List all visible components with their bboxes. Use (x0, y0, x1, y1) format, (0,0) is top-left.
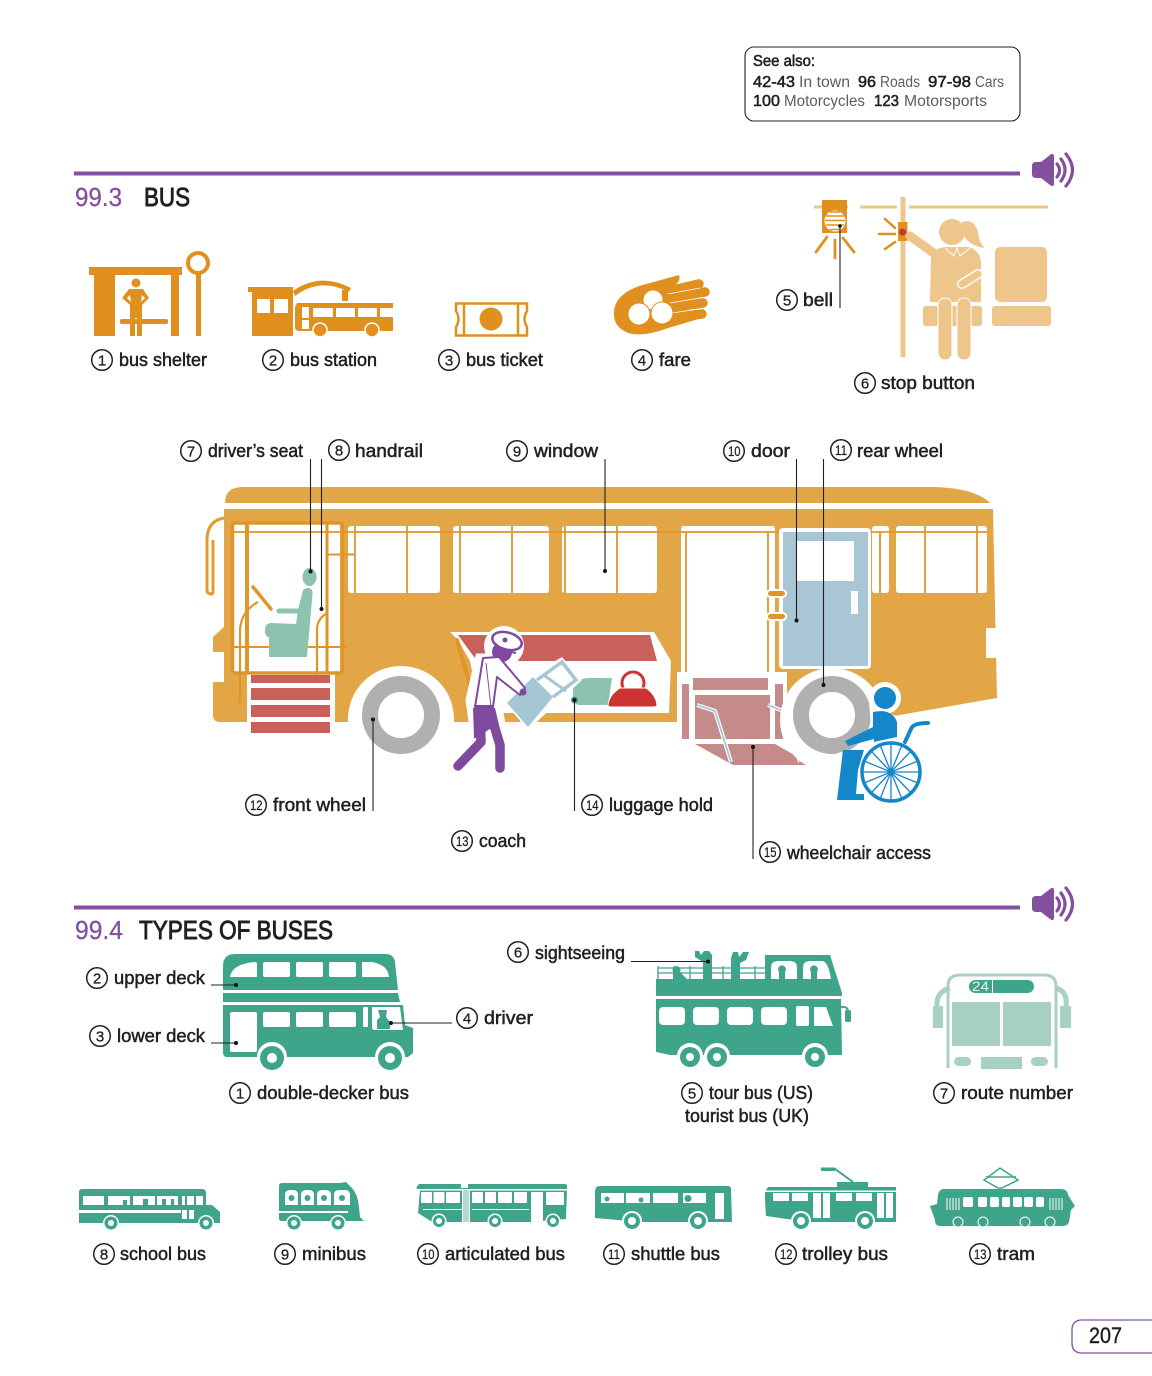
label: school bus: school bus (120, 1244, 206, 1264)
leader: window (603, 459, 607, 573)
label: tour bus: tour bus (US) (709, 1083, 813, 1103)
label: stop button: stop button (881, 373, 975, 393)
label: fare: fare (659, 350, 691, 370)
label: bell (777, 290, 833, 310)
label: driver (457, 1008, 533, 1028)
label: rear wheel: 11 (835, 442, 847, 458)
icon: route number bus front: 24 (972, 978, 989, 994)
label: window: window (533, 441, 599, 461)
heading 99.3 (75, 182, 190, 212)
icon: tram (930, 1168, 1075, 1227)
label: route number: 7 (940, 1086, 948, 1102)
label: wheelchair access: 15 (764, 844, 777, 860)
label: lower deck: 3 (96, 1028, 104, 1046)
heading 99.3: 99.3 (75, 182, 122, 212)
label: window (507, 441, 599, 461)
label: luggage hold: 14 (586, 797, 599, 813)
label: fare: 4 (638, 352, 646, 370)
label: coach (452, 831, 526, 851)
label: trolley bus: 12 (780, 1246, 793, 1262)
driver's seat (265, 568, 316, 657)
icon: tour bus (656, 951, 851, 1069)
label: upper deck: upper deck (114, 968, 206, 988)
icon: speaker 99.3 (1032, 154, 1072, 186)
leader: driver's seat (308, 459, 312, 574)
see also box: In town (799, 74, 850, 91)
figure: coach driver with suitcase (450, 626, 582, 775)
figure: wheelchair user (835, 682, 928, 808)
see also box (745, 47, 1020, 121)
label: double-decker bus: 1 (236, 1086, 244, 1102)
label: bell: bell (803, 290, 833, 310)
illustration: main bus (207, 487, 998, 808)
label: upper deck: 2 (93, 970, 101, 988)
icon: shuttle bus (595, 1186, 732, 1231)
label: front wheel: front wheel (273, 795, 366, 815)
see also box: 96 (858, 74, 876, 91)
label: coach: coach (479, 831, 526, 851)
leader: upper deck (211, 983, 238, 987)
section rule 99.4 (74, 906, 1020, 910)
leader: door (794, 459, 798, 622)
bus body (207, 487, 998, 734)
label: door: door (751, 441, 790, 461)
label: door (724, 441, 790, 461)
see also box: Motorsports (904, 93, 987, 110)
label: door: 10 (728, 443, 741, 459)
label: trolley bus: trolley bus (802, 1244, 888, 1264)
label: rear wheel: rear wheel (857, 441, 943, 461)
label: bus shelter: bus shelter (119, 350, 207, 370)
heading 99.4 (75, 915, 333, 945)
see also box: Roads (880, 74, 920, 91)
label: bell: 5 (783, 292, 791, 310)
label: school bus: 8 (100, 1246, 108, 1264)
label: tour bus: 5 (688, 1086, 696, 1102)
heading 99.3: BUS (144, 182, 190, 212)
leader: lower deck (211, 1041, 238, 1045)
icon: articulated bus (416, 1184, 567, 1228)
label: handrail (329, 440, 423, 461)
page number (1072, 1320, 1152, 1353)
icon: bus ticket (456, 303, 527, 336)
label: double-decker bus: double-decker bus (257, 1083, 409, 1103)
label: minibus: 9 (281, 1246, 289, 1264)
heading 99.4: TYPES OF BUSES (139, 915, 333, 945)
icon: fare hand with coins (614, 275, 706, 334)
icon: bus station (248, 281, 393, 337)
label: handrail: 8 (335, 442, 343, 460)
leader: driver (389, 1021, 452, 1025)
label: shuttle bus: shuttle bus (631, 1244, 720, 1264)
label: front wheel: 12 (250, 797, 263, 813)
icon: trolley bus (765, 1168, 896, 1231)
label: luggage hold: luggage hold (609, 795, 713, 815)
label: articulated bus: 10 (422, 1246, 435, 1262)
label: lower deck: lower deck (117, 1026, 206, 1046)
see also box: Motorcycles (784, 93, 865, 110)
leader: wheelchair access (751, 745, 755, 859)
icon: school bus (79, 1189, 220, 1231)
label: fare (632, 350, 691, 370)
label: bus ticket: bus ticket (466, 350, 543, 370)
label: driver: 4 (463, 1010, 471, 1028)
see also box: Cars (975, 74, 1004, 91)
label: bus station: bus station (290, 350, 377, 370)
label: driver: driver (484, 1008, 533, 1028)
see also box: See also: (753, 53, 815, 70)
leader: front wheel (371, 718, 375, 811)
icon: speaker 99.4 (1032, 888, 1072, 920)
sightseeing passenger one (695, 951, 712, 979)
label: route number: route number (961, 1083, 1073, 1103)
leader: luggage hold (571, 696, 578, 811)
wheelchair access ramp (677, 672, 812, 765)
icon: bell (816, 200, 854, 258)
bus windows (233, 524, 987, 674)
label: tram: tram (997, 1244, 1035, 1264)
icon: double-decker bus (223, 954, 413, 1072)
label: bus ticket: 3 (445, 352, 453, 370)
luggage hold (450, 632, 671, 713)
icon: bus shelter (89, 253, 208, 336)
leader: handrail (320, 459, 324, 611)
label: minibus (275, 1244, 366, 1264)
label: sightseeing: sightseeing (535, 943, 625, 963)
label: handrail: handrail (355, 441, 423, 461)
icon: stop button scene (810, 197, 1051, 360)
label: wheelchair access: wheelchair access (786, 843, 931, 863)
see also box: 42-43 (753, 74, 795, 91)
label: stop button: 6 (861, 376, 869, 392)
icon: route number bus front (933, 975, 1071, 1069)
rear wheel (780, 668, 884, 772)
label: bus station: 2 (269, 352, 277, 370)
label: driver's seat: driver’s seat (208, 441, 303, 461)
label: coach: 13 (456, 833, 469, 849)
leader: sightseeing (631, 960, 710, 964)
label: bus shelter: 1 (98, 352, 106, 370)
see also box: 100 (753, 93, 780, 110)
front wheel (340, 666, 465, 782)
front door frame (232, 523, 354, 703)
leader: rear wheel (822, 459, 826, 687)
label: tour bus: tourist bus (UK) (685, 1106, 809, 1126)
label: tram (970, 1244, 1035, 1264)
see also box: 97-98 (928, 74, 971, 91)
heading 99.4: 99.4 (75, 915, 123, 945)
icon: minibus (279, 1182, 364, 1231)
label: articulated bus: articulated bus (445, 1244, 565, 1264)
label: minibus: minibus (302, 1244, 366, 1264)
label: shuttle bus: 11 (608, 1246, 620, 1262)
door (766, 528, 871, 669)
see also box: 123 (874, 93, 899, 110)
label: driver's seat: 7 (187, 444, 195, 460)
label: window: 9 (513, 444, 521, 460)
leader: bell (838, 224, 842, 308)
section rule 99.3 (74, 172, 1020, 176)
steps (251, 675, 330, 733)
sightseeing passenger two (731, 952, 749, 979)
label: sightseeing: 6 (514, 944, 522, 962)
label: tram: 13 (974, 1246, 987, 1262)
page number: 207 (1089, 1323, 1122, 1348)
label: tour bus (682, 1083, 813, 1126)
